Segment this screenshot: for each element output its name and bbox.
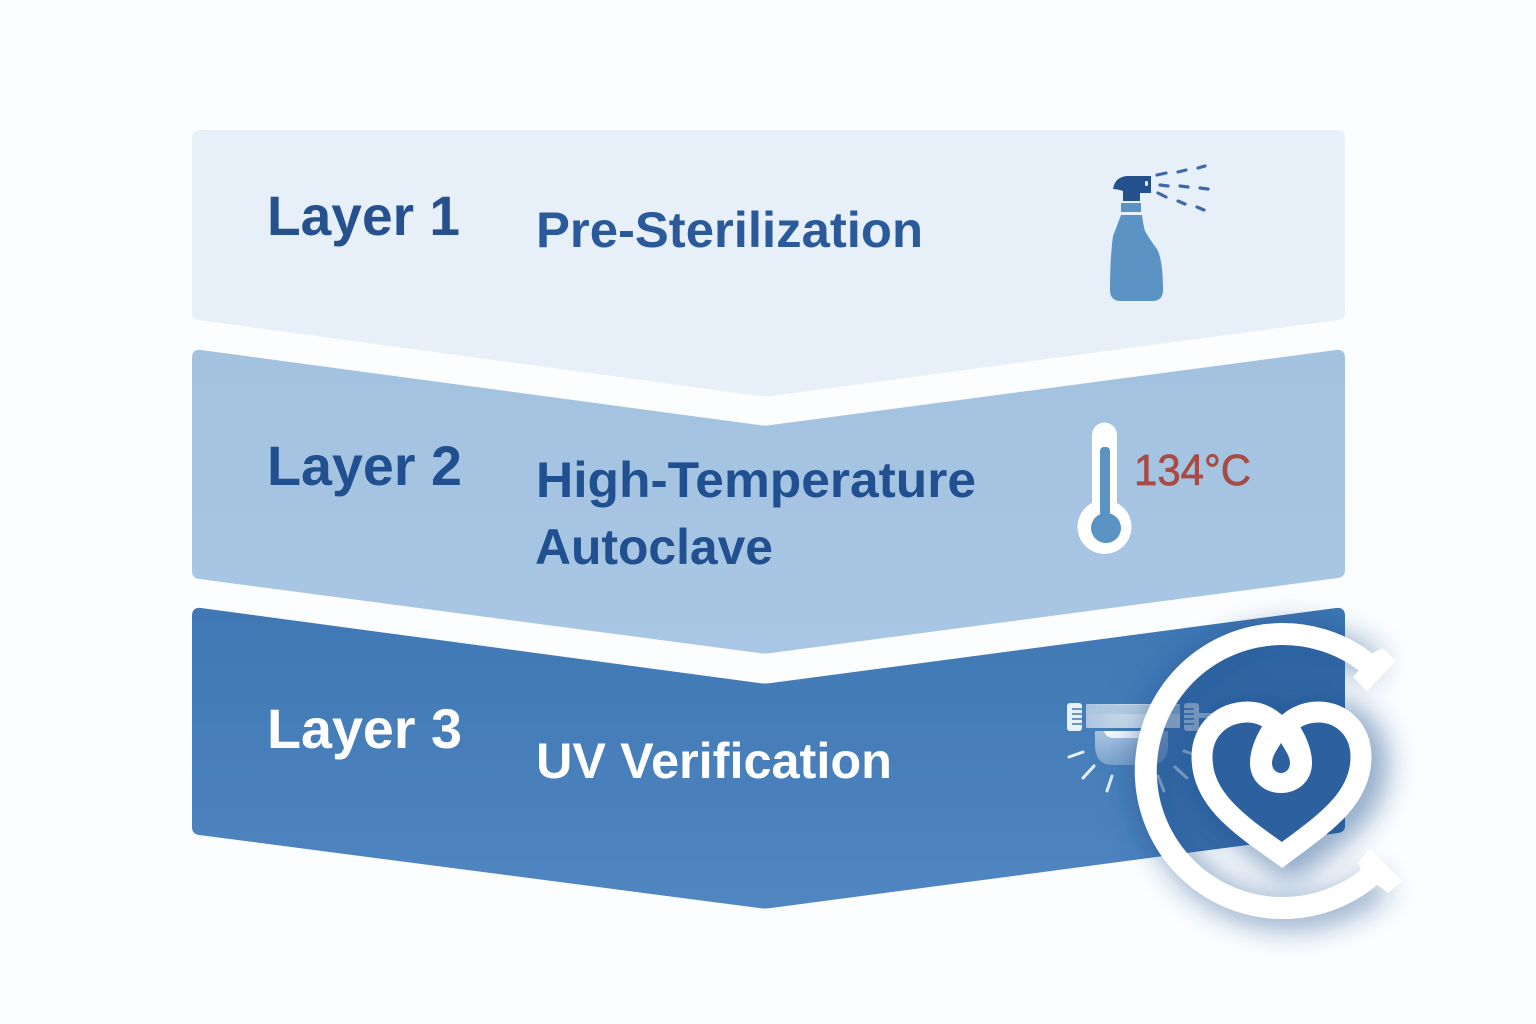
- icon shadow: [1154, 640, 1380, 914]
- icon: UV lamp: [1067, 703, 1215, 791]
- layer 2 title: Autoclave: [535, 519, 773, 575]
- darkened area inside ring: [1110, 617, 1345, 856]
- water drop: [1272, 743, 1290, 773]
- heart inner loop: [1250, 716, 1312, 793]
- layer 2 label: Layer 2: [267, 434, 462, 497]
- layer 1 label: Layer 1: [267, 184, 460, 247]
- layer 3 label: Layer 3: [267, 697, 462, 760]
- icon: heart and circular arrows: [1146, 634, 1402, 914]
- icon: thermometer: [1078, 422, 1132, 554]
- panel: layer 1: [192, 130, 1345, 396]
- layer 3 chevron shape: [192, 608, 1345, 908]
- temperature reading: 134°C: [1134, 446, 1251, 495]
- heart interior: [1202, 712, 1361, 855]
- circular arrow ring: [1146, 634, 1372, 908]
- layer 2 title: High-Temperature: [536, 452, 976, 508]
- panel: layer 2: [192, 350, 1345, 654]
- bottom arrowhead: [1358, 849, 1402, 893]
- heart outline: [1202, 712, 1361, 855]
- icon: spray bottle: [1110, 166, 1208, 301]
- layer 2 chevron shape: [192, 350, 1345, 654]
- top arrowhead: [1353, 648, 1396, 691]
- layer 1 title: Pre-Sterilization: [536, 202, 923, 258]
- layer 3 title: UV Verification: [536, 733, 892, 789]
- panel: layer 3: [192, 608, 1345, 908]
- layer 1 chevron shape: [192, 130, 1345, 396]
